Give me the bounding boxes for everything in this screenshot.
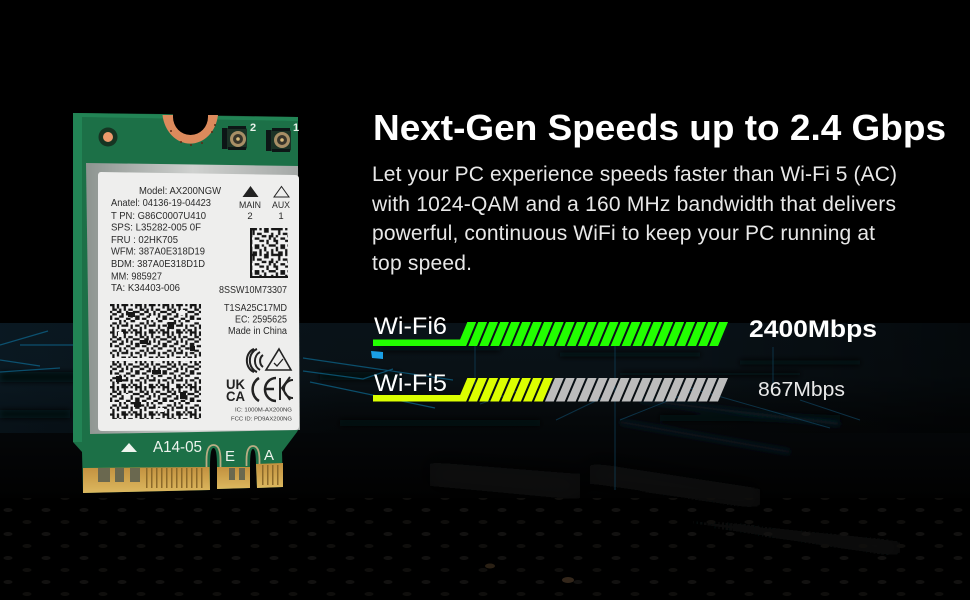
label: serial text: Made in China <box>228 326 287 337</box>
label: model text: Anatel: 04136-19-04423 <box>111 197 211 209</box>
background: circuit blocks <box>0 346 860 454</box>
Wi-Fi 6 speed bar <box>373 313 728 346</box>
card: connector numbers <box>250 122 299 134</box>
label: serial text <box>219 285 287 337</box>
Wi-Fi 5 speed value: 867Mbps <box>758 379 845 401</box>
label: model text: SPS: L35282-005 0F <box>111 222 201 234</box>
label: main antenna marker <box>239 186 261 222</box>
card: connector numbers: 1 <box>293 122 299 134</box>
label: aux antenna marker: AUX <box>272 200 291 211</box>
label: large data matrix <box>110 304 201 419</box>
label: model text: T PN: G86C0007U410 <box>111 210 206 222</box>
Wi-Fi 5 grey stripes <box>545 378 728 402</box>
card: silkscreen: A <box>264 447 274 464</box>
card: silkscreen: E <box>225 448 235 465</box>
body text: with 1024-QAM and a 160 MHz bandwidth that delivers <box>371 193 896 216</box>
label: main antenna marker: 2 <box>247 211 253 222</box>
title: Next-Gen Speeds up to 2.4 Gbps <box>373 107 946 148</box>
label: serial text: T1SA25C17MD <box>224 303 287 314</box>
card: notch outlines <box>206 445 260 468</box>
label: model text: Model: AX200NGW <box>139 185 221 197</box>
card: copper ring notch <box>162 112 218 146</box>
body text: Let your PC experience speeds faster than Wi-Fi 5 (AC) <box>372 163 897 186</box>
card: metal shield <box>86 163 300 434</box>
label: serial text: 8SSW10M73307 <box>219 285 287 296</box>
Wi-Fi 5 baseline <box>373 395 460 402</box>
label: model text: BDM: 387A0E318D1D <box>111 258 205 270</box>
Wi-Fi 5 speed bar <box>373 370 728 402</box>
label: small data matrix <box>250 228 288 278</box>
card: mounting pad <box>98 128 118 146</box>
card: white label <box>98 172 299 431</box>
label: model text: FRU : 02HK705 <box>111 234 178 246</box>
label: main antenna marker: MAIN <box>239 200 261 211</box>
label: aux antenna marker: 1 <box>278 211 284 222</box>
Wi-Fi 6 label: Wi-Fi6 <box>374 313 447 340</box>
Wi-Fi card <box>73 112 300 493</box>
Wi-Fi 5 yellow stripes <box>457 378 553 402</box>
label: certification ids: FCC ID: PD9AX200NG <box>231 416 292 422</box>
Wi-Fi 6 stripes <box>457 322 728 346</box>
Wi-Fi 6 speed value: 2400Mbps <box>749 316 877 343</box>
icon: blue square accent <box>371 351 383 359</box>
card: board edge highlight <box>73 113 298 442</box>
Wi-Fi 5 label: Wi-Fi5 <box>374 370 447 397</box>
label: model text <box>111 185 221 294</box>
label: regulatory marks <box>247 349 293 401</box>
card: antenna connector 1 <box>266 128 291 152</box>
card: antenna connector 2 <box>222 126 247 150</box>
card: silkscreen: A14-05 <box>153 439 202 456</box>
label: certification ids <box>231 408 293 422</box>
label: UKCA mark <box>226 376 245 404</box>
label: certification ids: IC: 1000M-AX200NG <box>235 408 293 414</box>
card: connector numbers: 2 <box>250 122 256 134</box>
body text: powerful, continuous WiFi to keep your PC running at <box>372 222 875 245</box>
card: PCB board <box>73 113 298 493</box>
label: serial text: EC: 2595625 <box>235 314 287 326</box>
label: model text: MM: 985927 <box>111 270 162 282</box>
Wi-Fi 6 baseline <box>373 340 460 346</box>
label: aux antenna marker <box>272 186 291 222</box>
label: UKCA mark: UK <box>226 376 245 392</box>
card: silkscreen <box>121 439 274 465</box>
card: gold contacts <box>83 463 283 493</box>
label: UKCA mark: CA <box>226 388 245 404</box>
background: glowing traces <box>0 331 453 408</box>
label: model text: WFM: 387A0E318D19 <box>111 246 205 258</box>
body text <box>371 163 897 275</box>
body text: top speed. <box>372 252 472 275</box>
label: model text: TA: K34403-006 <box>111 282 180 294</box>
